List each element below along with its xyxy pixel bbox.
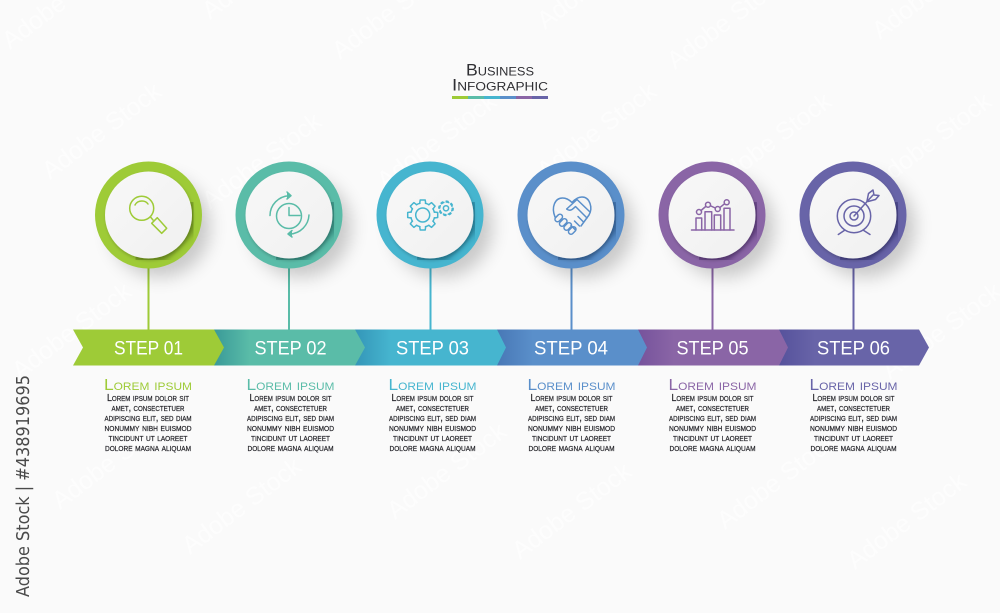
stock credit: Adobe Stock | #438919695 (13, 375, 34, 597)
text block: step 1 (104, 377, 192, 454)
arrow: step 4: STEP 04 (534, 338, 608, 360)
panel: step 5 circle (658, 162, 774, 332)
arrow: step 5 (638, 330, 788, 366)
text: Adobe Stock (37, 77, 167, 185)
text block: step 1: nonummy nibh euismod (104, 423, 192, 434)
text block: step 6: Lorem ipsum (810, 377, 898, 394)
text block: step 5: tincidunt ut laoreet (673, 433, 753, 444)
text block: step 3: amet, consectetuer (396, 403, 469, 414)
text: Adobe Stock (842, 467, 972, 575)
text block: step 3: dolore magna aliquam (390, 443, 476, 454)
text block: step 2: dolore magna aliquam (248, 443, 334, 454)
text block: step 3: adipiscing elit, sed diam (389, 413, 476, 424)
text block: step 6: dolore magna aliquam (810, 443, 897, 454)
title: Infographic (452, 76, 548, 94)
arrow: step 2 (214, 330, 365, 366)
text block: step 4: Lorem ipsum (528, 377, 616, 394)
icon: magnifying glass (130, 196, 167, 233)
arrow: step 3: STEP 03 (396, 338, 469, 360)
text: Adobe Stock (7, 277, 137, 385)
icon: handshake heart (553, 197, 591, 235)
text block: step 4: amet, consectetuer (535, 403, 608, 414)
text block: step 6: nonummy nibh euismod (810, 423, 897, 434)
text: Adobe Stock (532, 77, 662, 185)
text block: step 4 (528, 377, 616, 454)
text: Adobe Stock (47, 407, 177, 515)
text block: step 1: amet, consectetuer (112, 403, 184, 414)
text block: step 6: Lorem ipsum dolor sit (812, 393, 895, 404)
text block: step 5: dolore magna aliquam (670, 443, 756, 454)
text: Adobe Stock (712, 427, 842, 535)
arrow: step 1: STEP 01 (114, 338, 183, 360)
text block: step 2 (246, 377, 334, 454)
arrow: step 5: STEP 05 (676, 338, 749, 360)
text block: step 5: Lorem ipsum dolor sit (672, 393, 754, 404)
text: Adobe Stock (867, 87, 997, 195)
text block: step 3: Lorem ipsum dolor sit (392, 393, 474, 404)
arrow: step 2: STEP 02 (254, 338, 326, 360)
text block: step 4: adipiscing elit, sed diam (528, 413, 615, 424)
text block: step 1: Lorem ipsum (104, 377, 192, 394)
icon: bar chart with trend line (692, 200, 734, 230)
text: Adobe Stock (197, 107, 327, 215)
text: Adobe Stock (372, 87, 502, 195)
title: Business (466, 62, 534, 80)
text block: step 3: nonummy nibh euismod (389, 423, 476, 434)
panel: step 1 circle (95, 162, 210, 332)
text block: step 3: Lorem ipsum (388, 377, 476, 394)
text block: step 3 (388, 377, 476, 454)
text block: step 2: nonummy nibh euismod (247, 423, 334, 434)
text block: step 2: tincidunt ut laoreet (251, 433, 331, 444)
text block: step 5: amet, consectetuer (676, 403, 749, 414)
text block: step 2: Lorem ipsum (246, 377, 334, 394)
text: Adobe Stock (177, 452, 307, 560)
text block: step 6: tincidunt ut laoreet (814, 433, 894, 444)
text block: step 1: dolore magna aliquam (105, 443, 191, 454)
icon: gears (408, 200, 453, 230)
text block: step 1: adipiscing elit, sed diam (104, 413, 192, 424)
arrow: step 6 (779, 330, 929, 366)
text block: step 5: nonummy nibh euismod (669, 423, 756, 434)
arrow: step 4 (497, 330, 647, 366)
panel: step 2 circle (236, 162, 351, 332)
text block: step 6: adipiscing elit, sed diam (810, 413, 897, 424)
text block: step 6: amet, consectetuer (817, 403, 890, 414)
panel: step 3 circle (376, 162, 492, 332)
panel: step 4 circle (518, 162, 633, 332)
text block: step 5: adipiscing elit, sed diam (669, 413, 756, 424)
text block: step 5: Lorem ipsum (668, 377, 756, 394)
text block: step 3: tincidunt ut laoreet (393, 433, 473, 444)
text block: step 1: Lorem ipsum dolor sit (107, 393, 190, 404)
icon: target with arrow (837, 190, 879, 234)
text: Adobe Stock (382, 417, 512, 525)
text block: step 4: dolore magna aliquam (528, 443, 615, 454)
text block: step 2: Lorem ipsum dolor sit (250, 393, 332, 404)
text block: step 1: tincidunt ut laoreet (108, 433, 188, 444)
text: Adobe Stock (507, 457, 637, 565)
arrow: step 3 (355, 330, 506, 366)
arrow: step 1 (73, 330, 224, 366)
text block: step 4: tincidunt ut laoreet (532, 433, 612, 444)
text block: step 2: adipiscing elit, sed diam (247, 413, 334, 424)
icon: clock with cycle arrows (270, 192, 309, 237)
text block: step 6 (810, 377, 898, 454)
text block: step 5 (668, 377, 756, 454)
arrow: step 6: STEP 06 (817, 338, 890, 360)
panel: step 6 circle (800, 162, 915, 332)
text block: step 2: amet, consectetuer (254, 403, 327, 414)
title (452, 62, 548, 99)
text block: step 4: Lorem ipsum dolor sit (530, 393, 613, 404)
text block: step 4: nonummy nibh euismod (528, 423, 615, 434)
text: Adobe Stock (707, 87, 837, 195)
